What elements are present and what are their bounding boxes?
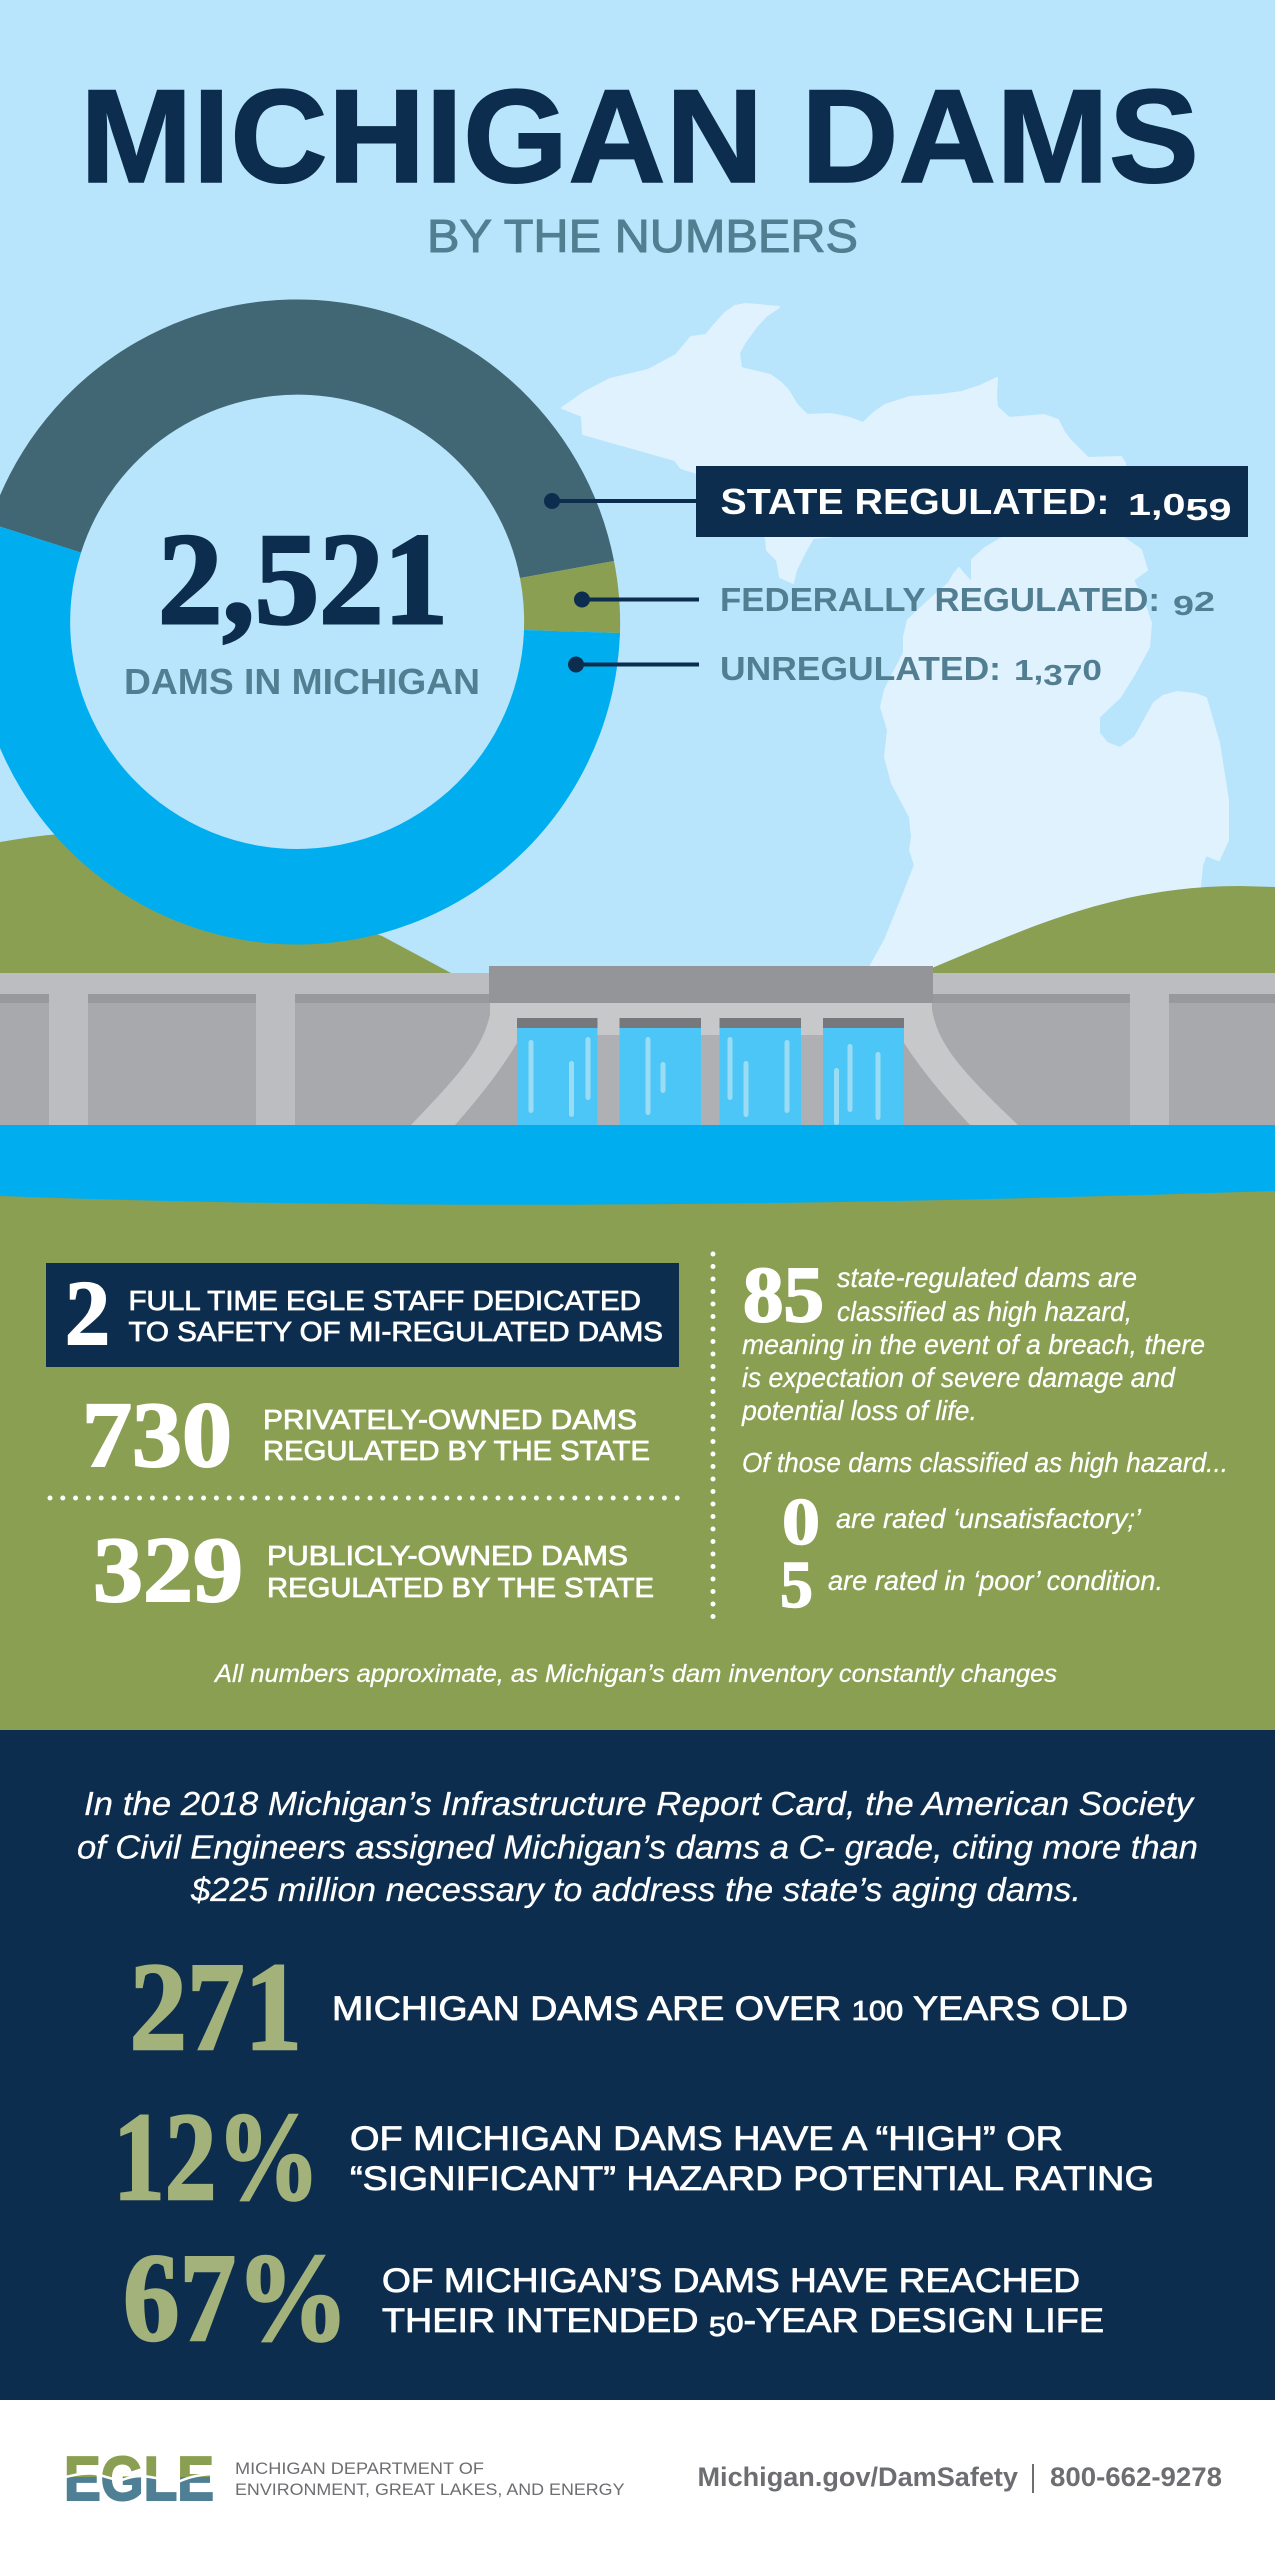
callout: state regulated: STATE REGULATED: <box>720 481 1110 522</box>
stat: hazard potential: OF MICHIGAN DAMS HAVE A “HIGH” OR <box>350 2120 1063 2158</box>
agency name <box>235 2459 624 2499</box>
total number: 2,521 <box>158 507 448 652</box>
falling water streaks <box>528 1037 880 1125</box>
stat: publicly-owned dams: PUBLICLY-OWNED DAMS <box>267 1540 628 1571</box>
stat: design life: -YEAR DESIGN LIFE <box>743 2302 1068 2340</box>
stat: unsatisfactory: 0 <box>782 1485 820 1559</box>
hill: right <box>915 886 1275 985</box>
contact info: 800-662-9278 <box>1050 2462 1222 2492</box>
stat: poor condition <box>780 1548 1163 1622</box>
spillway gates <box>517 1018 904 1125</box>
dam center block <box>489 966 933 1003</box>
agency name: MICHIGAN DEPARTMENT OF <box>235 2459 484 2478</box>
stat: staff box: TO SAFETY OF MI-REGULATED DAMS <box>128 1316 663 1347</box>
stat: unsatisfactory: are rated ‘unsatisfactory;’ <box>836 1503 1142 1534</box>
segment: state regulated <box>0 299 614 578</box>
logo: EGLE: EGLE <box>64 2445 214 2514</box>
stat: privately-owned dams: 730 <box>82 1384 232 1487</box>
panel: green ground <box>0 1180 1275 1730</box>
contact info <box>698 2462 1222 2493</box>
report card text: In the 2018 Michigan’s Infrastructure Report Card, the American Society <box>84 1785 1196 1822</box>
stat: over 100 years old: 271 <box>130 1938 302 2077</box>
stat: hazard potential <box>113 2088 1154 2227</box>
stat: design life: THEIR INTENDED <box>382 2302 667 2340</box>
dam wall <box>0 1003 1275 1128</box>
report card text <box>77 1785 1198 1908</box>
callout: federally regulated: 2 <box>1194 586 1215 617</box>
stat: design life: 5 <box>709 2311 726 2342</box>
stat: poor condition: are rated in ‘poor’ condition. <box>828 1565 1163 1596</box>
stat: privately-owned dams: REGULATED BY THE STATE <box>263 1435 650 1466</box>
stat: design life <box>123 2229 1104 2368</box>
segment: federally regulated <box>520 561 620 633</box>
agency name: ENVIRONMENT, GREAT LAKES, AND ENERGY <box>235 2480 624 2499</box>
stat: high hazard dams: meaning in the event of a breach, there <box>742 1329 1205 1360</box>
stat: high hazard dams: 85 <box>743 1252 824 1339</box>
callout: federally regulated <box>574 581 1215 621</box>
stat: poor condition: 5 <box>780 1548 813 1622</box>
footer <box>0 2400 1275 2550</box>
callout: unregulated: 0 <box>1082 655 1102 687</box>
callout: unregulated: 1, <box>1014 655 1038 687</box>
stat: design life: OF MICHIGAN’S DAMS HAVE REACHED <box>382 2262 1080 2300</box>
stat: design life: 0 <box>726 2307 743 2338</box>
stat: publicly-owned dams: 329 <box>93 1519 243 1622</box>
callout: unregulated: 37 <box>1043 660 1082 692</box>
stat: publicly-owned dams <box>93 1519 654 1622</box>
donut center total <box>124 507 480 702</box>
stat: high hazard dams: state-regulated dams are <box>837 1262 1137 1293</box>
stat: design life: 67% <box>123 2229 349 2368</box>
stat: privately-owned dams: PRIVATELY-OWNED DAMS <box>263 1404 637 1435</box>
text: high hazard intro: Of those dams classified as high hazard... <box>742 1447 1228 1478</box>
callout: state regulated <box>544 466 1248 537</box>
stat: publicly-owned dams: REGULATED BY THE STATE <box>267 1572 654 1603</box>
stat: high hazard dams: potential loss of life. <box>741 1395 977 1426</box>
title: MICHIGAN DAMS <box>80 63 1199 211</box>
callout: state regulated: 1,0 <box>1128 487 1171 522</box>
donut chart: dams by regulation <box>0 299 620 945</box>
stat: staff box: 2 <box>65 1262 110 1364</box>
callout: unregulated <box>568 650 1102 692</box>
stat: staff box <box>46 1262 679 1367</box>
stat: over 100 years old <box>130 1938 1128 2077</box>
stat: hazard potential: 12% <box>113 2088 320 2227</box>
report card text: $225 million necessary to address the state’s aging dams. <box>190 1871 1081 1908</box>
illustration: dam <box>0 966 1275 1128</box>
callout: federally regulated: FEDERALLY REGULATED: <box>720 581 1160 618</box>
stat: high hazard dams: classified as high hazard, <box>837 1296 1132 1327</box>
stat: unsatisfactory <box>782 1485 1142 1559</box>
callout: unregulated: UNREGULATED: <box>720 650 1001 687</box>
segment: unregulated <box>0 523 620 945</box>
panel: navy report card <box>0 1730 1275 2400</box>
stat: privately-owned dams <box>82 1384 650 1487</box>
footnote: All numbers approximate, as Michigan’s dam inventory constantly changes <box>213 1660 1057 1688</box>
subtitle: BY THE NUMBERS <box>427 210 858 262</box>
stat: high hazard dams <box>741 1252 1205 1426</box>
stat: high hazard dams: is expectation of severe damage and <box>742 1362 1176 1393</box>
callout: federally regulated: 9 <box>1173 590 1194 621</box>
hill: left <box>0 832 451 985</box>
sky background <box>0 0 1275 1130</box>
report card text: of Civil Engineers assigned Michigan’s dams a C- grade, citing more than <box>77 1828 1198 1866</box>
stat: staff box: FULL TIME EGLE STAFF DEDICATED <box>128 1285 641 1316</box>
river <box>0 1125 1275 1205</box>
contact info: Michigan.gov/DamSafety <box>698 2462 1018 2492</box>
map: Michigan silhouette <box>562 304 1228 967</box>
stat: hazard potential: “SIGNIFICANT” HAZARD POTENTIAL RATING <box>350 2160 1154 2198</box>
stat: over 100 years old: MICHIGAN DAMS ARE OVER 100 YEARS OLD <box>332 1990 1128 2028</box>
total caption: DAMS IN MICHIGAN <box>124 661 480 702</box>
callout: state regulated: 59 <box>1186 492 1232 527</box>
